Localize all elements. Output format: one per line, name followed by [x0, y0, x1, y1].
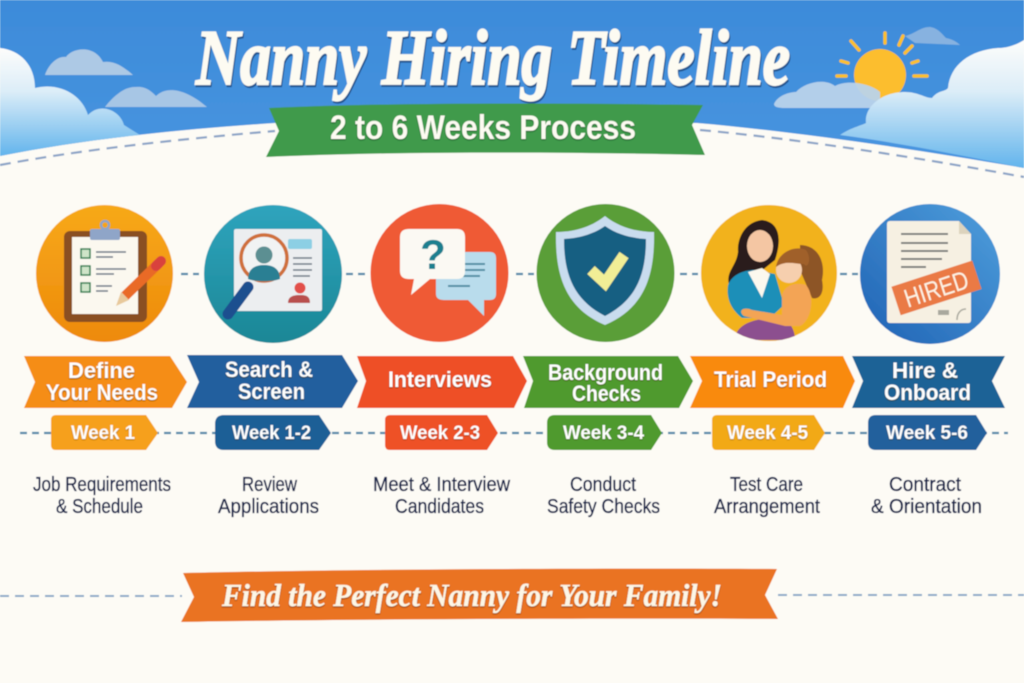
- step 2 chevron: Search & Screen: [187, 355, 358, 408]
- week tag 2: [215, 415, 331, 450]
- step 5 icon: nanny holding child: [701, 205, 837, 341]
- footer ribbon: [181, 569, 778, 622]
- large cloud: left: [0, 48, 140, 156]
- connector dashes between circles: [181, 273, 858, 275]
- description 1: [33, 474, 171, 518]
- dashed stitching under header: [0, 130, 1024, 177]
- step 5 chevron: Trial Period: Trial Period: [714, 367, 827, 392]
- ribbon: subtitle: [266, 103, 705, 157]
- stamp: hired: HIRED: [900, 264, 972, 313]
- description 4: Conduct: [570, 474, 636, 496]
- step 3 chevron: Interviews: Interviews: [388, 367, 492, 392]
- week tag 1: [51, 415, 158, 450]
- week tag 5: [712, 415, 825, 450]
- description 3: Candidates: [395, 496, 484, 518]
- description 2: [218, 474, 319, 518]
- small cloud: upper right: [905, 27, 960, 45]
- step 3 icon: speech bubbles: [370, 204, 508, 342]
- step 4 chevron: Background Checks: [523, 356, 693, 408]
- step 4 chevron: Background Checks: Background: [548, 360, 663, 385]
- week tag 3: Week 2-3: [400, 423, 480, 444]
- description 5: [714, 474, 820, 518]
- description 5: Arrangement: [714, 496, 820, 518]
- description 6: Contract: [889, 474, 961, 496]
- title: Nanny Hiring Timeline: [195, 14, 790, 101]
- description 4: Safety Checks: [547, 496, 660, 518]
- step 1 chevron: Define Your Needs: [24, 356, 187, 408]
- small cloud: upper left: [45, 49, 133, 75]
- week tag 1: Week 1: [71, 423, 135, 444]
- header sky: [0, 0, 1024, 168]
- week tag 2: Week 1-2: [232, 423, 311, 444]
- week tag 4: [547, 415, 662, 450]
- description 4: [547, 474, 660, 518]
- step 4 chevron: Background Checks: Checks: [572, 381, 641, 406]
- step 6 chevron: Hire & Onboard: [852, 356, 1005, 408]
- subtitle: 2 to 6 Weeks Process: [330, 109, 636, 147]
- small cloud: mid left: [105, 87, 207, 107]
- small cloud: by sun: [774, 82, 880, 108]
- timeline dashed line: [20, 432, 1008, 434]
- step 2 icon: magnifying glass over application: [204, 205, 342, 343]
- step 6 chevron: Hire & Onboard: Hire &: [892, 358, 958, 383]
- footer slogan: Find the Perfect Nanny for Your Family!: [221, 577, 722, 613]
- step 3 icon: speech bubbles: ?: [420, 231, 446, 278]
- description 1: & Schedule: [56, 496, 143, 518]
- step 2 chevron: Search & Screen: Screen: [238, 379, 305, 404]
- week tag 3: [385, 415, 498, 450]
- large cloud: right: [840, 40, 1024, 168]
- description 6: & Orientation: [871, 496, 982, 518]
- step 6 chevron: Hire & Onboard: Onboard: [884, 380, 971, 405]
- icon: sun: [837, 33, 927, 101]
- step 1 icon: clipboard: [36, 205, 173, 342]
- description 5: Test Care: [730, 474, 803, 496]
- week tag 6: Week 5-6: [886, 423, 968, 444]
- week tag 4: Week 3-4: [563, 423, 644, 444]
- step 5 chevron: Trial Period: [690, 356, 855, 408]
- footer dashed lines: [0, 595, 1024, 596]
- description 2: Review: [242, 474, 297, 496]
- week tag 6: [868, 415, 987, 450]
- description 3: Meet & Interview: [373, 474, 511, 496]
- step 4 icon: shield: [536, 204, 674, 342]
- description 1: Job Requirements: [33, 474, 171, 496]
- step 1 chevron: Define Your Needs: Define: [68, 358, 135, 383]
- step 1 chevron: Define Your Needs: Your Needs: [46, 380, 158, 405]
- description 3: [373, 474, 511, 518]
- step 3 chevron: Interviews: [357, 356, 527, 408]
- step 2 chevron: Search & Screen: Search &: [225, 357, 313, 382]
- week tag 5: Week 4-5: [727, 423, 808, 444]
- description 6: [871, 474, 982, 518]
- description 2: Applications: [218, 496, 319, 518]
- step 6 icon: hired contract: [860, 204, 1000, 344]
